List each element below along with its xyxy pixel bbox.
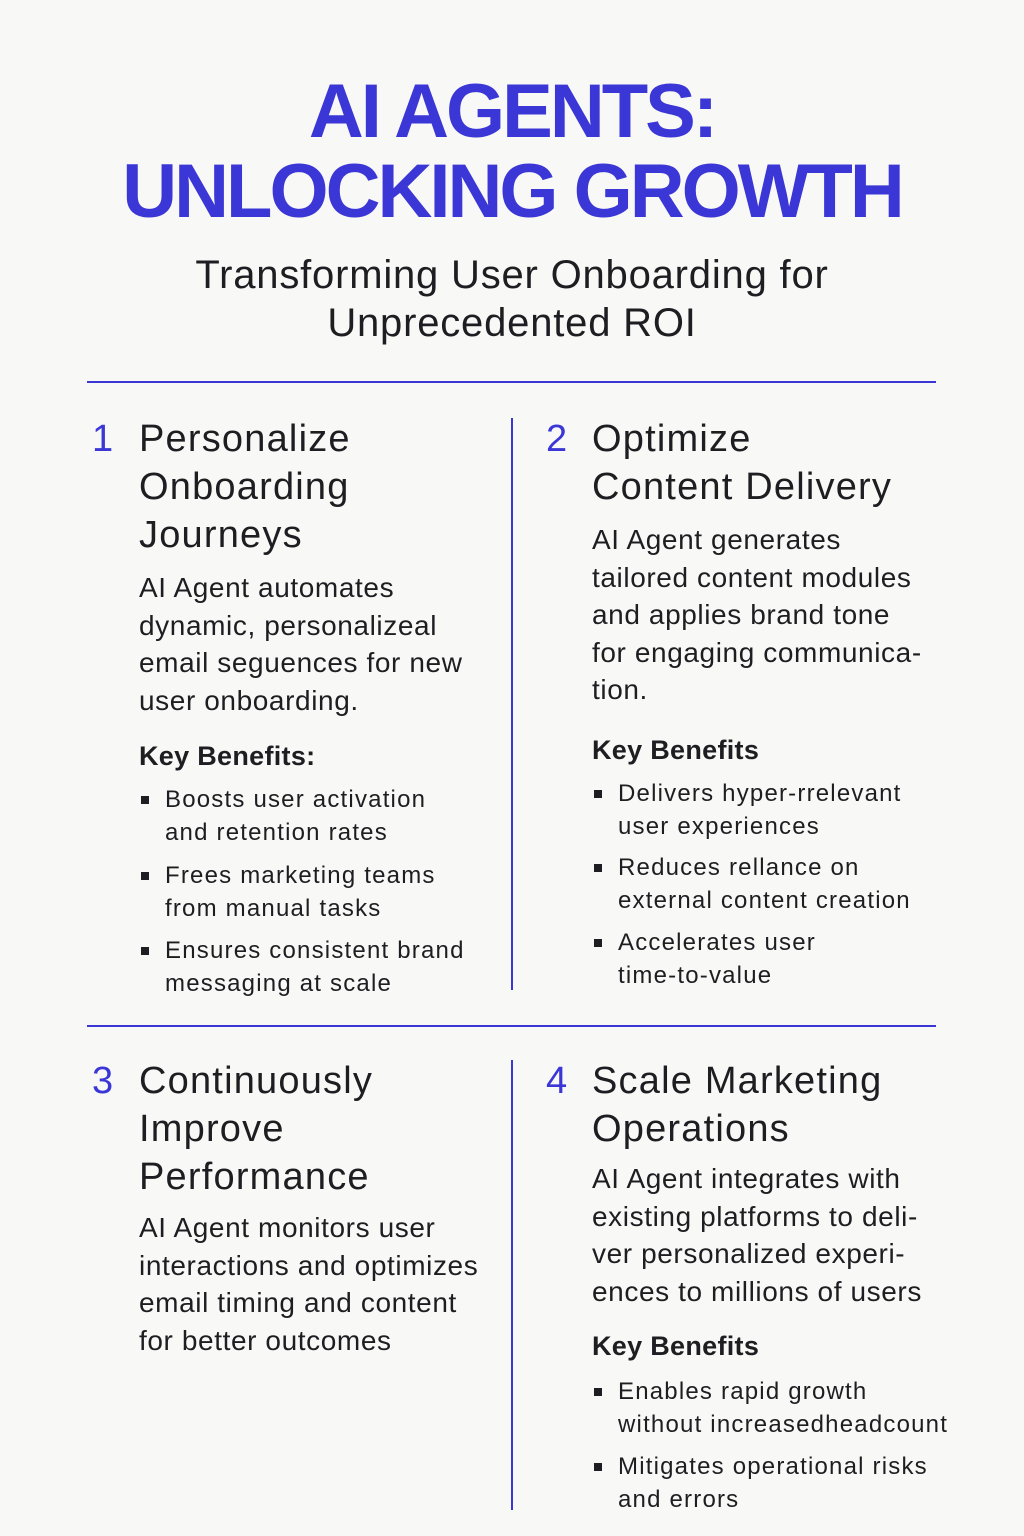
heading 3: Performance	[139, 1156, 370, 1198]
body 3: email timing and content	[139, 1287, 457, 1318]
heading 3	[139, 1060, 373, 1198]
body 2	[592, 524, 922, 705]
bullets 4: Enables rapid growth	[618, 1378, 867, 1405]
number 3: 3	[92, 1060, 113, 1102]
number 4: 4	[546, 1060, 567, 1102]
heading 4	[592, 1060, 882, 1150]
bullets 1: and retention rates	[165, 819, 388, 846]
body 2: for engaging communica-	[592, 636, 922, 668]
body 2: and applies brand tone	[592, 599, 890, 630]
title: AI AGENTS:	[309, 69, 715, 154]
body 4	[592, 1163, 922, 1306]
bullets 1: messaging at scale	[165, 970, 392, 997]
body 2: tailored content modules	[592, 562, 911, 592]
heading 1: Personalize	[139, 418, 351, 460]
bullets 4: without increasedheadcount	[618, 1411, 948, 1438]
heading 4: Operations	[592, 1108, 790, 1150]
bullets 1	[141, 786, 465, 997]
bullets 2: external content creation	[618, 887, 911, 914]
body 2: AI Agent generates	[592, 524, 841, 555]
body 4: existing platforms to deli-	[592, 1200, 918, 1232]
body 3: AI Agent monitors user	[139, 1212, 435, 1243]
key benefits 4: Key Benefits	[592, 1331, 759, 1361]
heading 3: Improve	[139, 1108, 285, 1150]
key benefits 1: Key Benefits:	[139, 741, 315, 771]
body 4: AI Agent integrates with	[592, 1163, 901, 1194]
panel 2	[546, 418, 922, 989]
key benefits 2: Key Benefits	[592, 735, 759, 765]
heading 1: Onboarding	[139, 466, 350, 508]
body 1: email seguences for new	[139, 647, 463, 678]
bullets 2: time-to-value	[618, 962, 772, 989]
body 4: ver personalized experi-	[592, 1238, 905, 1269]
heading 2	[592, 418, 892, 508]
body 4: ences to millions of users	[592, 1276, 922, 1306]
body 1: AI Agent automates	[139, 572, 394, 603]
bullets 4: and errors	[618, 1486, 739, 1513]
body 3: interactions and optimizes	[139, 1250, 478, 1280]
body 1	[139, 572, 463, 716]
body 2: tion.	[592, 674, 648, 705]
heading 1	[139, 418, 351, 556]
bullets 4: Mitigates operational risks	[618, 1453, 928, 1480]
bullets 1: Ensures consistent brand	[165, 937, 465, 964]
body 1: dynamic, personalizeal	[139, 610, 437, 640]
body 3: for better outcomes	[139, 1324, 392, 1356]
heading 3: Continuously	[139, 1060, 373, 1102]
panel 3	[92, 1060, 478, 1356]
heading 2: Content Delivery	[592, 466, 892, 508]
heading 2: Optimize	[592, 418, 752, 460]
bullets 1: from manual tasks	[165, 895, 381, 922]
bullets 2: user experiences	[618, 813, 820, 840]
subtitle: Unprecedented ROI	[327, 301, 697, 345]
heading 4: Scale Marketing	[592, 1060, 882, 1102]
bullets 2	[594, 780, 911, 989]
body 3	[139, 1212, 478, 1356]
bullets 2: Delivers hyper-rrelevant	[618, 780, 902, 807]
panel 1	[92, 418, 465, 997]
bullets 2: Accelerates user	[618, 929, 816, 956]
title	[122, 69, 902, 234]
bullets 4	[594, 1378, 948, 1513]
number 1: 1	[92, 418, 113, 460]
panel 4	[546, 1060, 948, 1513]
title: UNLOCKING GROWTH	[122, 149, 902, 234]
subtitle	[195, 253, 829, 345]
heading 1: Journeys	[139, 514, 303, 556]
bullets 2: Reduces rellance on	[618, 854, 860, 881]
bullets 1: Frees marketing teams	[165, 862, 436, 889]
bullets 1: Boosts user activation	[165, 786, 426, 813]
subtitle: Transforming User Onboarding for	[195, 253, 829, 297]
number 2: 2	[546, 418, 567, 460]
body 1: user onboarding.	[139, 684, 359, 716]
